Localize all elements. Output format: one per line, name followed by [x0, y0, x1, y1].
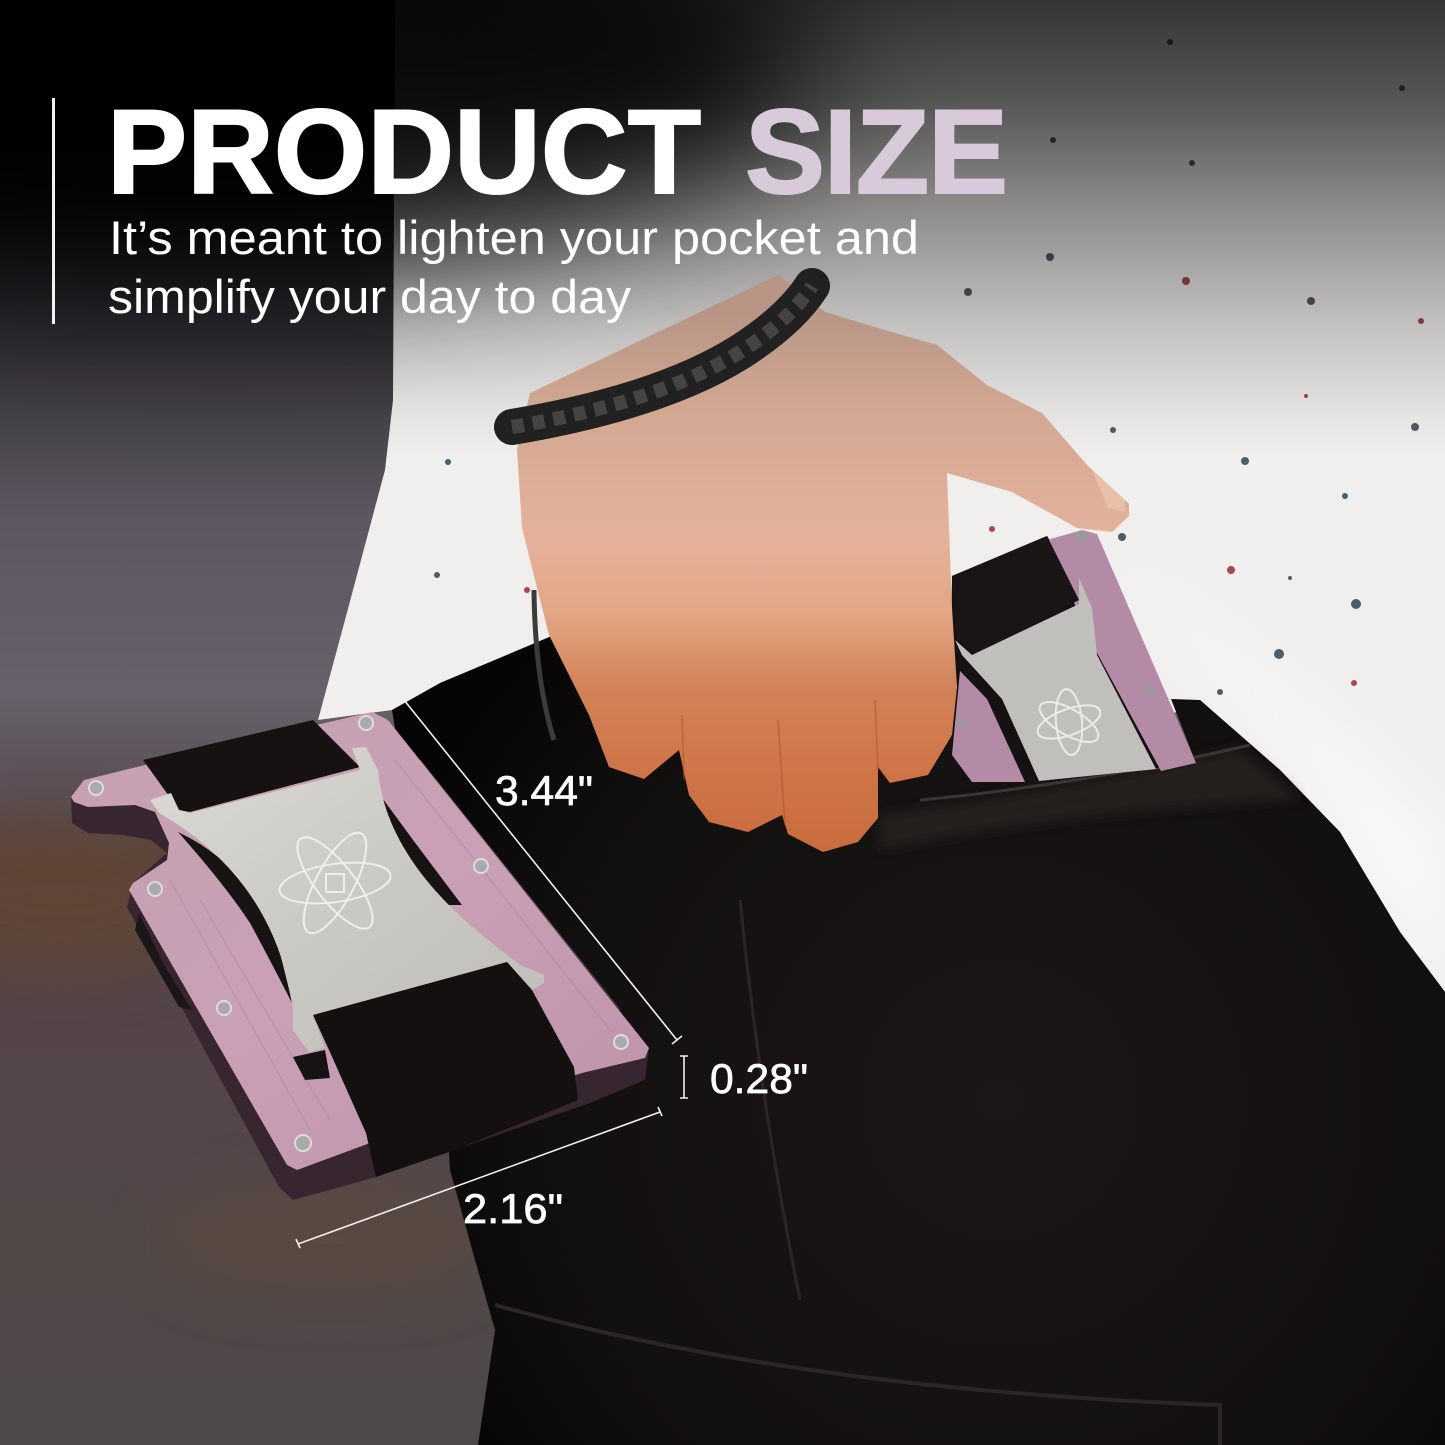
- wallet top face: [71, 712, 649, 1170]
- wallet backing: [925, 536, 1196, 784]
- small wallet in pocket: [925, 530, 1196, 784]
- brushed lines: [170, 760, 620, 1130]
- front elastic band: [313, 962, 578, 1177]
- rear elastic band: [143, 720, 360, 812]
- screws: [89, 716, 628, 1151]
- dimension: width 2.16: [296, 1107, 662, 1248]
- braided leather bracelet: [512, 286, 812, 427]
- left dark vignette: [0, 0, 820, 260]
- large wallet product: [71, 712, 649, 1200]
- subtitle: [108, 211, 919, 323]
- shirt pattern dots: [434, 39, 1419, 695]
- black trousers: [392, 635, 1445, 1445]
- subtitle: It’s meant to lighten your pocket and: [109, 211, 919, 264]
- top dark gradient overlay: [0, 0, 1445, 460]
- subtitle: simplify your day to day: [108, 270, 632, 323]
- finger divisions: [682, 700, 878, 825]
- dark elastic crescents: [178, 832, 293, 1005]
- hand and wrist: [517, 275, 1129, 852]
- dimension: width 2.16: 2.16": [463, 1185, 563, 1232]
- drawstring cord: [534, 590, 554, 740]
- title: PRODUCT: [107, 85, 701, 219]
- dimension: thickness 0.28: 0.28": [710, 1055, 808, 1102]
- etched atom logo: [277, 825, 393, 941]
- title rule: [52, 98, 55, 324]
- white shirt: [318, 0, 1445, 1000]
- thumbnail: [1092, 470, 1125, 512]
- title: [107, 85, 1008, 219]
- plate shadow: [293, 1050, 330, 1080]
- metal money clip plate: [150, 747, 544, 1052]
- wallet body side: [71, 720, 649, 1200]
- dimension: length 3.44: 3.44": [495, 767, 593, 814]
- side elastic strip: [135, 913, 192, 1010]
- dimension: length 3.44: [393, 690, 682, 1044]
- title: SIZE: [745, 85, 1008, 219]
